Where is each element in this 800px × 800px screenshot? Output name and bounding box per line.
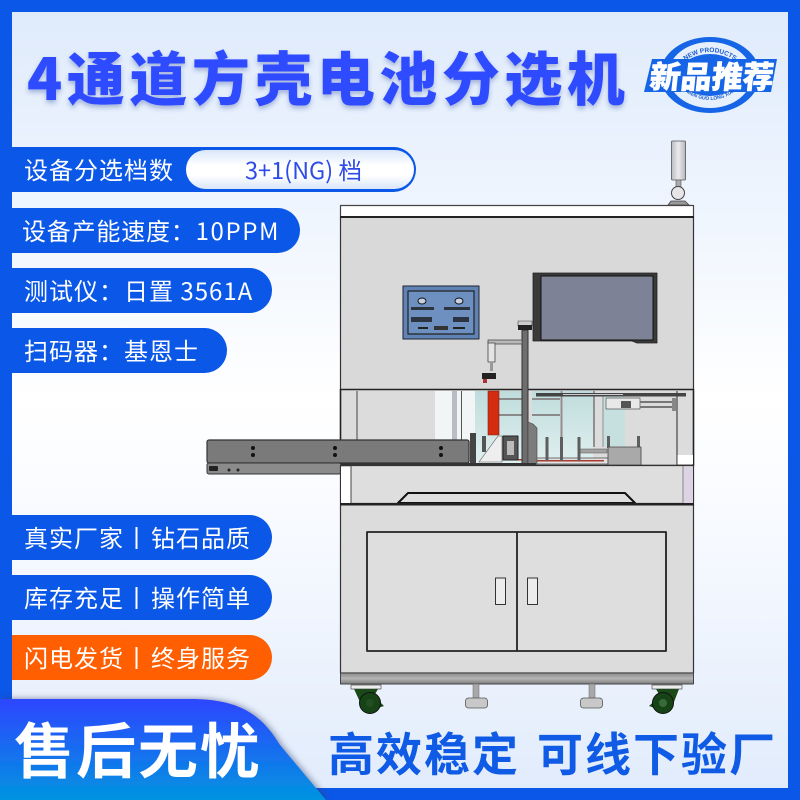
middle work area bbox=[340, 390, 694, 466]
pill: sufficient stock bbox=[0, 575, 272, 620]
badge: new products: 新品推荐 bbox=[648, 52, 777, 97]
pill: fast shipping bbox=[12, 635, 272, 680]
signal tower bbox=[668, 141, 689, 205]
pill: real factory bbox=[0, 515, 272, 560]
pill: scanner: 扫码器：基恩士 bbox=[24, 332, 199, 367]
bottom slogan: 高效稳定 bbox=[328, 719, 520, 785]
pill: capacity speed: 设备产能速度：10PPM bbox=[22, 212, 280, 247]
machine illustration bbox=[207, 141, 694, 714]
pill: sorting grades: 设备分选档数 bbox=[24, 151, 174, 186]
badge: new products: NEW PRODUCTS bbox=[683, 48, 736, 60]
pill: tester bbox=[0, 268, 272, 313]
scanner arm bbox=[482, 321, 532, 465]
badge: new products bbox=[644, 37, 777, 113]
pill: sorting grades: 3+1(NG) 档 bbox=[245, 152, 362, 186]
badge: new products: MEN GUO LONG XIA bbox=[687, 90, 734, 100]
pill: capacity speed bbox=[0, 208, 300, 253]
bottom slogan bbox=[328, 719, 777, 785]
conveyor bbox=[207, 440, 536, 474]
pill: fast shipping: 终身服务 bbox=[151, 639, 251, 674]
pill: tester: 测试仪：日置 3561A bbox=[24, 272, 253, 307]
touch monitor bbox=[533, 273, 657, 343]
lower cabinet bbox=[340, 503, 694, 673]
machine table bbox=[340, 466, 694, 504]
red guide bar bbox=[488, 391, 499, 435]
pill: fast shipping: 闪电发货 bbox=[24, 639, 124, 674]
bottom banner: after-sales bbox=[0, 699, 326, 800]
base rail bbox=[340, 673, 694, 684]
pill: real factory: 钻石品质 bbox=[151, 519, 251, 554]
pill: sorting grades bbox=[0, 147, 416, 192]
title: 4通道方壳电池分选机 bbox=[27, 33, 629, 117]
column base and clamp bbox=[470, 422, 537, 465]
casters and feet bbox=[351, 684, 682, 714]
pill: real factory: 真实厂家 bbox=[24, 519, 124, 554]
pill: sufficient stock: 操作简单 bbox=[151, 579, 251, 614]
bottom slogan: 可线下验厂 bbox=[537, 719, 777, 785]
pill: scanner bbox=[0, 328, 227, 373]
pill: sufficient stock: 库存充足 bbox=[24, 579, 124, 614]
upper cabinet bbox=[340, 206, 694, 390]
control panel bbox=[403, 286, 479, 339]
bottom banner: after-sales: 售后无忧 bbox=[14, 704, 262, 791]
